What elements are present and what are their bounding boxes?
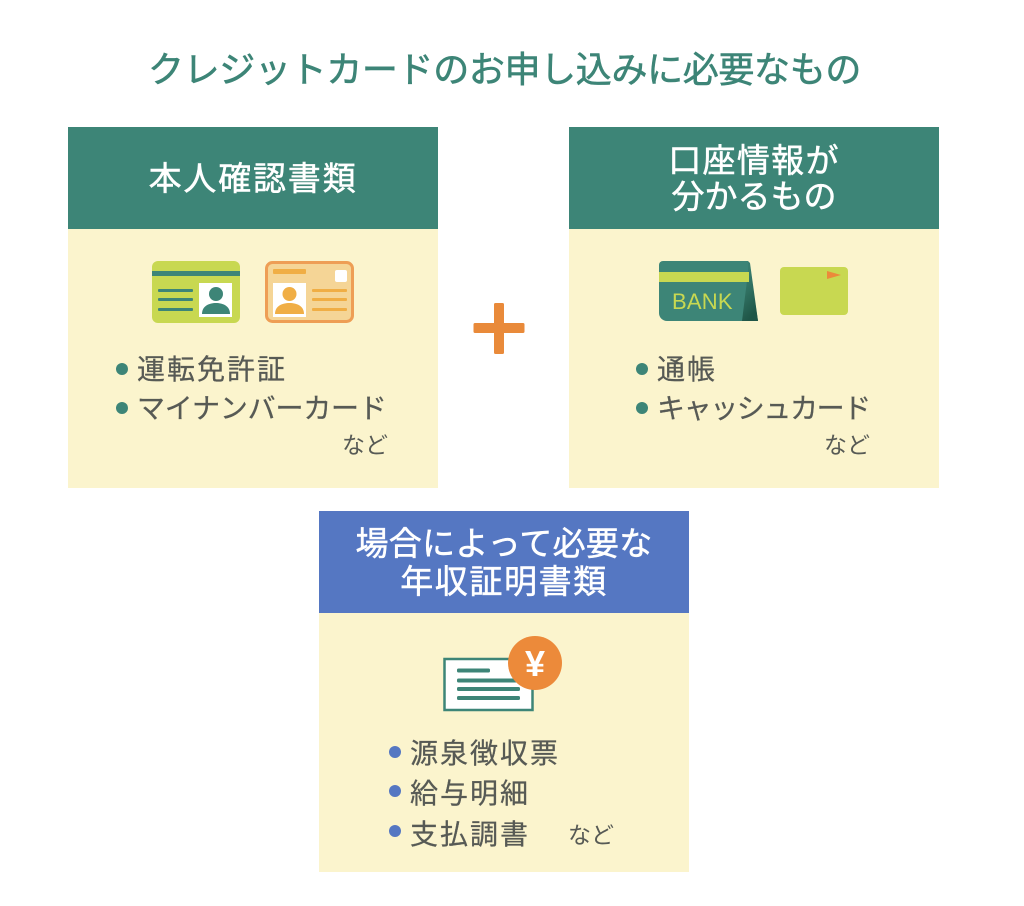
icon: bank passbook: BANK [672, 289, 733, 314]
note: など [568, 822, 614, 848]
icon: driver's licence [152, 261, 240, 323]
heading: income documents: 年収証明書類 [400, 562, 608, 600]
heading: account information: 分かるもの [672, 178, 836, 214]
title: クレジットカードのお申し込みに必要なもの [148, 49, 861, 90]
heading: income documents: 場合によって必要な [355, 524, 653, 562]
list item: マイナンバーカード [137, 393, 387, 424]
bullet [636, 402, 648, 414]
list item: 源泉徴収票 [410, 738, 560, 769]
heading: income documents [319, 511, 689, 613]
panel: income documents [319, 511, 689, 872]
icon: income statement with yen: ¥ [525, 643, 545, 684]
bullet [116, 402, 128, 414]
bullet [389, 785, 401, 797]
heading: account information [569, 127, 939, 229]
heading: identity documents [68, 127, 438, 229]
list item: 通帳 [657, 354, 717, 385]
icon: income statement with yen [443, 636, 562, 712]
note: など [824, 432, 870, 458]
list item: 運転免許証 [137, 354, 287, 385]
panel: identity documents [68, 127, 438, 488]
bullet [389, 746, 401, 758]
bullet [116, 363, 128, 375]
panel: account information [569, 127, 939, 488]
icon: plus [474, 303, 524, 354]
note: など [342, 432, 388, 458]
heading: account information: 口座情報が [668, 142, 840, 179]
list item: キャッシュカード [657, 393, 870, 424]
bullet [389, 825, 401, 837]
icon: cash card [780, 267, 848, 315]
bullet [636, 363, 648, 375]
list item: 支払調書 [410, 819, 530, 850]
list item: 給与明細 [410, 778, 530, 809]
icon: My Number card [265, 261, 354, 323]
heading: identity documents: 本人確認書類 [149, 160, 357, 196]
icon: bank passbook [659, 261, 758, 321]
